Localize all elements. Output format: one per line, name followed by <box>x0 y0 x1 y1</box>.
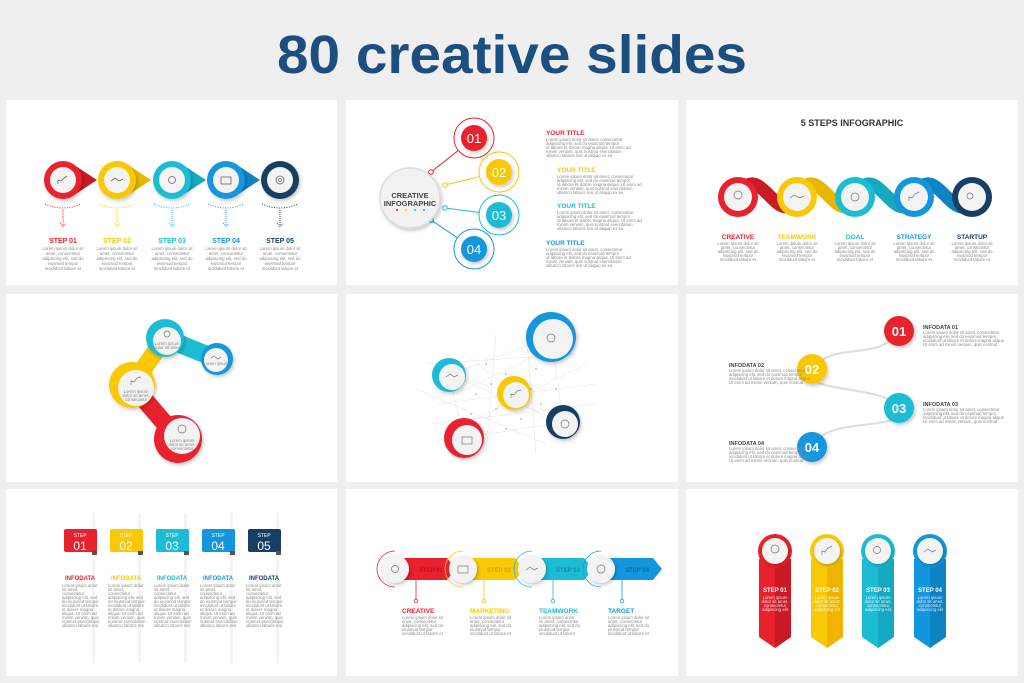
labels: Lorem ipsum dolor sit <box>834 241 876 246</box>
text blocks: minim veniam, quis nostrud exercitation <box>557 222 633 227</box>
step 1: incididunt labore et <box>45 266 82 271</box>
tab 3 <box>156 529 189 555</box>
arrow 1: adipiscing elit <box>762 607 789 612</box>
infodata columns: minim veniam, quis <box>154 615 191 620</box>
tab 5: STEP <box>257 533 271 539</box>
unit 4: adipiscing elit, sed do <box>608 623 650 628</box>
tab 3: STEP <box>165 533 179 539</box>
infodata columns: INFODATA <box>203 576 234 582</box>
infodata texts: INFODATA 03 <box>923 402 958 408</box>
network lines <box>416 329 596 454</box>
step 2 <box>96 161 151 271</box>
infodata columns: do eiusmod tempor <box>62 599 99 604</box>
arrow 1 <box>758 534 792 648</box>
infodata columns: minim veniam, quis <box>108 615 145 620</box>
infodata columns: consectetur <box>62 591 85 596</box>
arrow 2: dolor sit amet, <box>814 599 840 604</box>
tab 1: STEP <box>73 533 87 539</box>
tab 1 <box>64 529 97 555</box>
infodata columns: nostrud exercitation <box>246 619 284 624</box>
yellow node: dolor sit amet, <box>122 393 150 398</box>
unit 1: amet, consectetur <box>402 619 437 624</box>
infodata columns: do eiusmod tempor <box>200 599 237 604</box>
infodata columns: nostrud exercitation <box>200 619 238 624</box>
unit 3: sit amet, consectetur <box>539 619 579 624</box>
unit 3: Lorem ipsum dolor <box>539 615 575 620</box>
navy node <box>546 405 580 439</box>
infodata columns <box>62 576 284 628</box>
yellow node: Lorem ipsum <box>124 389 149 394</box>
text blocks: minim veniam, quis nostrud exercitation <box>546 149 622 154</box>
infodata columns: et dolore magna <box>200 607 232 612</box>
unit 4: STEP 04 <box>625 568 650 574</box>
step 3: eiusmod tempor <box>157 261 188 266</box>
unit 2: amet, consectetur <box>470 619 505 624</box>
infodata columns: incididunt ut labore <box>62 603 99 608</box>
labels: adipiscing elit, sed do <box>951 249 993 254</box>
infodata columns: aliqua. Ut enim ad <box>108 611 143 616</box>
arrow 3: Lorem ipsum <box>866 595 891 600</box>
infodata columns: et dolore magna <box>62 607 94 612</box>
infodata texts: Ut enim ad minim veniam, quis nostrud <box>923 342 998 347</box>
arrow 2: Lorem ipsum <box>815 595 840 600</box>
labels: eiusmod tempor <box>899 253 930 258</box>
text blocks: ullamco laboris nisi ut aliquip ex ea <box>557 226 624 231</box>
text blocks: Lorem ipsum dolor sit amet, consectetur <box>557 210 634 215</box>
text blocks: ut labore et dolore magna aliqua. Ut enim ad <box>557 182 642 187</box>
yellow node <box>109 362 155 408</box>
tab 1: 01 <box>73 539 87 553</box>
step 4: incididunt labore et <box>208 266 245 271</box>
panel: network <box>346 294 678 482</box>
labels: GOAL <box>846 234 864 241</box>
infodata columns: adipiscing elit, sed <box>154 595 190 600</box>
labels: Lorem ipsum dolor sit <box>893 241 935 246</box>
tab 4: 04 <box>211 539 225 553</box>
infodata columns: adipiscing elit, sed <box>62 595 98 600</box>
step 5: STEP 05 <box>266 238 294 245</box>
text blocks: Lorem ipsum dolor sit amet, consectetur <box>557 174 634 179</box>
infodata columns: et dolore magna <box>154 607 186 612</box>
step 3: adipiscing elit, sed do <box>151 256 193 261</box>
text blocks <box>546 130 642 268</box>
number 04: 04 <box>467 242 481 257</box>
tab 5 <box>248 529 281 555</box>
infodata columns: Lorem ipsum dolor <box>246 583 282 588</box>
infodata columns: aliqua. Ut enim ad <box>200 611 235 616</box>
03: 03 <box>892 401 906 416</box>
yellow node: consectetur <box>125 397 148 402</box>
text blocks: ut labore et dolore magna aliqua. Ut enim ad <box>546 145 631 150</box>
infodata texts: incididunt ut labore et dolore magna aliqua <box>729 454 811 459</box>
infodata columns: INFODATA <box>249 576 280 582</box>
infodata texts <box>729 325 1005 463</box>
infodata texts: incididunt ut labore et dolore magna aliqua <box>923 415 1005 420</box>
infodata columns: sit amet, <box>154 587 170 592</box>
arrow 4: consectetur <box>919 603 942 608</box>
cyan node: dolor sit amet <box>154 345 181 350</box>
infodata columns: adipiscing elit, sed <box>200 595 236 600</box>
text blocks: YOUR TITLE <box>546 130 585 137</box>
text blocks: YOUR TITLE <box>557 167 596 174</box>
number 01: 01 <box>467 131 481 146</box>
infodata columns: ullamco laboris nisi <box>246 623 282 628</box>
unit 2: eiusmod tempor <box>470 627 501 632</box>
step 4: STEP 04 <box>212 238 240 245</box>
infodata columns: do eiusmod tempor <box>246 599 283 604</box>
infodata texts: Ut enim ad minim veniam, quis nostrud <box>729 380 804 385</box>
step 1: amet, consectetur <box>46 251 81 256</box>
infodata columns: nostrud exercitation <box>62 619 100 624</box>
arrow 3: consectetur <box>867 603 890 608</box>
labels: TEAMWORK <box>778 234 817 241</box>
arrow 3: STEP 03 <box>866 588 891 594</box>
infodata columns: minim veniam, quis <box>200 615 237 620</box>
infodata columns: Lorem ipsum dolor <box>200 583 236 588</box>
infodata columns: Lorem ipsum dolor <box>154 583 190 588</box>
unit 3: adipiscing elit, sed do <box>539 623 581 628</box>
infodata columns: incididunt ut labore <box>246 603 283 608</box>
step 5 <box>259 161 301 271</box>
connectors <box>132 338 217 439</box>
step 4: adipiscing elit, sed do <box>205 256 247 261</box>
infodata texts: INFODATA 04 <box>729 441 765 447</box>
step 5: incididunt labore et <box>262 266 299 271</box>
red node <box>154 415 202 463</box>
labels: eiusmod tempor <box>840 253 871 258</box>
unit 1: eiusmod tempor <box>402 627 433 632</box>
infodata columns: aliqua. Ut enim ad <box>246 611 281 616</box>
text blocks: Lorem ipsum dolor sit amet, consectetur <box>546 247 623 252</box>
panel: 5 steps infographic <box>686 100 1018 285</box>
panel: arrow banners <box>346 489 678 676</box>
step 1: eiusmod tempor <box>48 261 79 266</box>
panel: infodata path <box>686 294 1018 482</box>
infodata columns: aliqua. Ut enim ad <box>62 611 97 616</box>
arrow 1: STEP 01 <box>763 588 788 594</box>
infodata columns: incididunt ut labore <box>154 603 191 608</box>
tab 5: 05 <box>257 539 271 553</box>
infodata texts: Lorem ipsum dolor sit amet, consectetur <box>729 368 806 373</box>
number 03: 03 <box>492 208 506 223</box>
text blocks: minim veniam, quis nostrud exercitation <box>557 186 633 191</box>
step 3: Lorem ipsum dolor sit <box>151 246 193 251</box>
step 5: adipiscing elit, sed do <box>259 256 301 261</box>
infodata columns: INFODATA <box>157 576 188 582</box>
arrow 2 <box>810 534 844 648</box>
step 1: STEP 01 <box>49 238 77 245</box>
unit 3: incididunt ut labore <box>539 631 576 636</box>
text blocks: ullamco laboris nisi ut aliquip ex ea <box>557 190 624 195</box>
infodata columns: Lorem ipsum dolor <box>62 583 98 588</box>
tab 2 <box>110 529 143 555</box>
unit 3 <box>514 551 593 636</box>
labels: incididunt labore et <box>837 257 874 262</box>
infodata columns: ullamco laboris nisi <box>154 623 190 628</box>
01 <box>884 316 914 346</box>
unit 4: eiusmod tempor <box>608 627 639 632</box>
unit 4: Lorem ipsum dolor sit <box>608 615 650 620</box>
step 5: amet, consectetur <box>263 251 298 256</box>
blue node <box>201 343 233 375</box>
infodata texts: Lorem ipsum dolor sit amet, consectetur <box>923 330 1000 335</box>
unit 1: incididunt ut labore et <box>402 631 444 636</box>
text blocks: Lorem ipsum dolor sit amet, consectetur <box>546 137 623 142</box>
infodata columns: nostrud exercitation <box>154 619 192 624</box>
infodata columns: sit amet, <box>108 587 124 592</box>
red node: consectetur <box>171 446 194 451</box>
cyan node <box>432 358 466 392</box>
unit 3: eiusmod tempor <box>539 627 570 632</box>
tab 2: 02 <box>119 539 133 553</box>
03 <box>884 393 914 423</box>
panel: vertical arrows <box>686 489 1018 676</box>
path curve <box>810 331 899 447</box>
arrow 4: Lorem ipsum <box>918 595 943 600</box>
number 03 <box>479 195 519 235</box>
labels: STRATEGY <box>897 234 932 241</box>
infodata texts: INFODATA 01 <box>923 325 958 331</box>
arrow 4: STEP 04 <box>918 588 943 594</box>
step 2: STEP 02 <box>103 238 131 245</box>
infodata columns: ullamco laboris nisi <box>200 623 236 628</box>
infodata columns: sit amet, <box>246 587 262 592</box>
infodata columns: adipiscing elit, sed <box>246 595 282 600</box>
step 4: eiusmod tempor <box>211 261 242 266</box>
arrow 4: adipiscing elit <box>917 607 944 612</box>
infodata columns: ullamco laboris nisi <box>62 623 98 628</box>
unit 3: TEAMWORK <box>539 608 578 615</box>
02: 02 <box>805 362 819 377</box>
number 02: 02 <box>492 165 506 180</box>
ribbons <box>748 184 963 207</box>
infodata columns: do eiusmod tempor <box>154 599 191 604</box>
unit 2 <box>445 551 524 636</box>
text blocks: adipiscing elit, sed do eiusmod tempor <box>546 251 620 256</box>
step 3 <box>151 161 206 271</box>
step circles <box>718 177 992 217</box>
labels: incididunt labore et <box>720 257 757 262</box>
text blocks: ut labore et dolore magna aliqua. Ut enim ad <box>546 255 631 260</box>
cyan node <box>146 319 184 357</box>
tab 2: STEP <box>119 533 133 539</box>
infodata texts: Ut enim ad minim veniam, quis nostrud <box>729 458 804 463</box>
red node: dolor sit amet, <box>168 442 196 447</box>
unit 1 <box>377 551 456 636</box>
step 5: Lorem ipsum dolor sit <box>259 246 301 251</box>
step 2: incididunt labore et <box>99 266 136 271</box>
text blocks: adipiscing elit, sed do eiusmod tempor <box>546 141 620 146</box>
step 4: amet, consectetur <box>209 251 244 256</box>
labels: amet, consectetur <box>838 245 873 250</box>
unit 2: Lorem ipsum dolor sit <box>470 615 512 620</box>
labels: CREATIVE <box>722 234 755 241</box>
labels: Lorem ipsum dolor sit <box>776 241 818 246</box>
infodata texts: adipiscing elit, sed do eiusmod tempor <box>923 411 997 416</box>
unit 4 <box>583 551 662 636</box>
infodata texts: adipiscing elit, sed do eiusmod tempor <box>729 372 803 377</box>
labels: amet, consectetur <box>897 245 932 250</box>
center circle: INFOGRAPHIC <box>384 199 437 208</box>
unit 1: adipiscing elit, sed do <box>402 623 444 628</box>
step 5: eiusmod tempor <box>265 261 296 266</box>
labels: incididunt labore et <box>954 257 991 262</box>
unit 2: STEP 02 <box>487 568 512 574</box>
panel: step arrows <box>6 100 337 285</box>
red node <box>444 418 484 458</box>
labels <box>717 234 993 262</box>
infodata columns: Lorem ipsum dolor <box>108 583 144 588</box>
labels: amet, consectetur <box>780 245 815 250</box>
infodata columns: minim veniam, quis <box>246 615 283 620</box>
text blocks: ut labore et dolore magna aliqua. Ut enim ad <box>557 218 642 223</box>
text blocks: adipiscing elit, sed do eiusmod tempor <box>557 178 631 183</box>
number 02 <box>479 152 519 192</box>
arrow 3 <box>861 534 895 648</box>
center circle <box>380 168 440 228</box>
text blocks: YOUR TITLE <box>546 240 585 247</box>
unit 1: CREATIVE <box>402 608 435 615</box>
panel: step tabs <box>6 489 337 676</box>
cyan node: Lorem ipsum <box>155 341 180 346</box>
labels: eiusmod tempor <box>723 253 754 258</box>
infodata columns: incididunt ut labore <box>200 603 237 608</box>
heading: 5 STEPS INFOGRAPHIC <box>801 118 904 128</box>
infodata columns: consectetur <box>246 591 269 596</box>
tab 4: STEP <box>211 533 225 539</box>
infodata columns: minim veniam, quis <box>62 615 99 620</box>
infodata texts: incididunt ut labore et dolore magna aliqua <box>729 376 811 381</box>
infodata texts: Lorem ipsum dolor sit amet, consectetur <box>923 407 1000 412</box>
arrow 4: dolor sit amet, <box>916 599 944 604</box>
panel: connected circles <box>6 294 337 482</box>
labels: incididunt labore et <box>896 257 933 262</box>
labels: amet, consectetur <box>955 245 990 250</box>
unit 4: incididunt ut labore et <box>608 631 650 636</box>
infodata columns: ullamco laboris nisi <box>108 623 144 628</box>
step 4 <box>205 161 260 271</box>
arrow 3: adipiscing elit <box>865 607 892 612</box>
infodata columns: consectetur <box>108 591 131 596</box>
04 <box>797 432 827 462</box>
infodata columns: consectetur <box>200 591 223 596</box>
red node: Lorem ipsum <box>170 438 195 443</box>
text blocks: minim veniam, quis nostrud exercitation <box>546 259 622 264</box>
step 1: adipiscing elit, sed do <box>42 256 84 261</box>
arrow 4 <box>913 534 947 648</box>
number 04 <box>454 229 494 269</box>
step 4: Lorem ipsum dolor sit <box>205 246 247 251</box>
labels: amet, consectetur <box>721 245 756 250</box>
labels: incididunt labore et <box>779 257 816 262</box>
step 3: incididunt labore et <box>154 266 191 271</box>
step 2: amet, consectetur <box>100 251 135 256</box>
labels: Lorem ipsum dolor sit <box>717 241 759 246</box>
labels: adipiscing elit, sed do <box>776 249 818 254</box>
blue node: Lorem ipsum <box>204 361 229 366</box>
unit 2: MARKETING <box>470 608 509 615</box>
infodata texts: INFODATA 02 <box>729 363 764 369</box>
step 2: adipiscing elit, sed do <box>96 256 138 261</box>
step 1 <box>42 161 97 271</box>
step 2: Lorem ipsum dolor sit <box>96 246 138 251</box>
yellow node <box>497 376 531 410</box>
arrow 2: consectetur <box>816 603 839 608</box>
tab 4 <box>202 529 235 555</box>
strip shadows <box>92 513 279 663</box>
unit 3: STEP 03 <box>556 568 581 574</box>
02 <box>797 354 827 384</box>
infodata columns: adipiscing elit, sed <box>108 595 144 600</box>
arrow 1: Lorem ipsum <box>763 595 788 600</box>
tab 3: 03 <box>165 539 179 553</box>
text blocks: adipiscing elit, sed do eiusmod tempor <box>557 214 631 219</box>
infodata columns: consectetur <box>154 591 177 596</box>
connectors <box>429 138 499 249</box>
labels: eiusmod tempor <box>957 253 988 258</box>
infodata columns: sit amet, <box>62 587 78 592</box>
01: 01 <box>892 324 906 339</box>
panel: creative infographic <box>346 100 678 285</box>
step 1: Lorem ipsum dolor sit <box>42 246 84 251</box>
arrow 1: consectetur <box>764 603 787 608</box>
infodata texts: adipiscing elit, sed do eiusmod tempor <box>729 450 803 455</box>
arrow 2: adipiscing elit <box>814 607 841 612</box>
labels: Lorem ipsum dolor sit <box>951 241 993 246</box>
labels: adipiscing elit, sed do <box>893 249 935 254</box>
text blocks: ullamco laboris nisi ut aliquip ex ea <box>546 263 613 268</box>
unit 4: TARGET <box>608 608 634 615</box>
infodata columns: aliqua. Ut enim ad <box>154 611 189 616</box>
infodata columns: do eiusmod tempor <box>108 599 145 604</box>
infodata columns: INFODATA <box>111 576 142 582</box>
step 2: eiusmod tempor <box>102 261 133 266</box>
arrow 1: dolor sit amet, <box>762 599 788 604</box>
infodata texts: Ut enim ad minim veniam, quis nostrud <box>923 419 998 424</box>
text blocks: ullamco laboris nisi ut aliquip ex ea <box>546 153 613 158</box>
unit 2: adipiscing elit, sed do <box>470 623 512 628</box>
arrow 3: dolor sit amet, <box>864 599 892 604</box>
number 01 <box>454 118 494 158</box>
infodata columns: INFODATA <box>65 576 96 582</box>
infodata columns: sit amet, <box>200 587 216 592</box>
step 3: amet, consectetur <box>155 251 190 256</box>
unit 1: STEP 01 <box>419 568 444 574</box>
center circle: CREATIVE <box>391 191 429 200</box>
arrow 2: STEP 02 <box>815 588 840 594</box>
infodata texts: adipiscing elit, sed do eiusmod tempor <box>923 334 997 339</box>
infodata columns: et dolore magna <box>108 607 140 612</box>
infodata columns: nostrud exercitation <box>108 619 146 624</box>
infodata columns: incididunt ut labore <box>108 603 145 608</box>
unit 2: incididunt ut labore et <box>470 631 512 636</box>
labels: adipiscing elit, sed do <box>834 249 876 254</box>
title: 80 creative slides <box>277 25 747 85</box>
blue node <box>526 312 576 362</box>
labels: STARTUP <box>957 234 988 241</box>
infodata texts: Lorem ipsum dolor sit amet, consectetur <box>729 446 806 451</box>
04: 04 <box>805 440 820 455</box>
text blocks: YOUR TITLE <box>557 203 596 210</box>
step 3: STEP 03 <box>158 238 186 245</box>
unit 1: Lorem ipsum dolor sit <box>402 615 444 620</box>
infodata texts: incididunt ut labore et dolore magna aliqua <box>923 338 1005 343</box>
labels: adipiscing elit, sed do <box>717 249 759 254</box>
labels: eiusmod tempor <box>782 253 813 258</box>
infodata columns: et dolore magna <box>246 607 278 612</box>
unit 4: amet, consectetur <box>608 619 643 624</box>
